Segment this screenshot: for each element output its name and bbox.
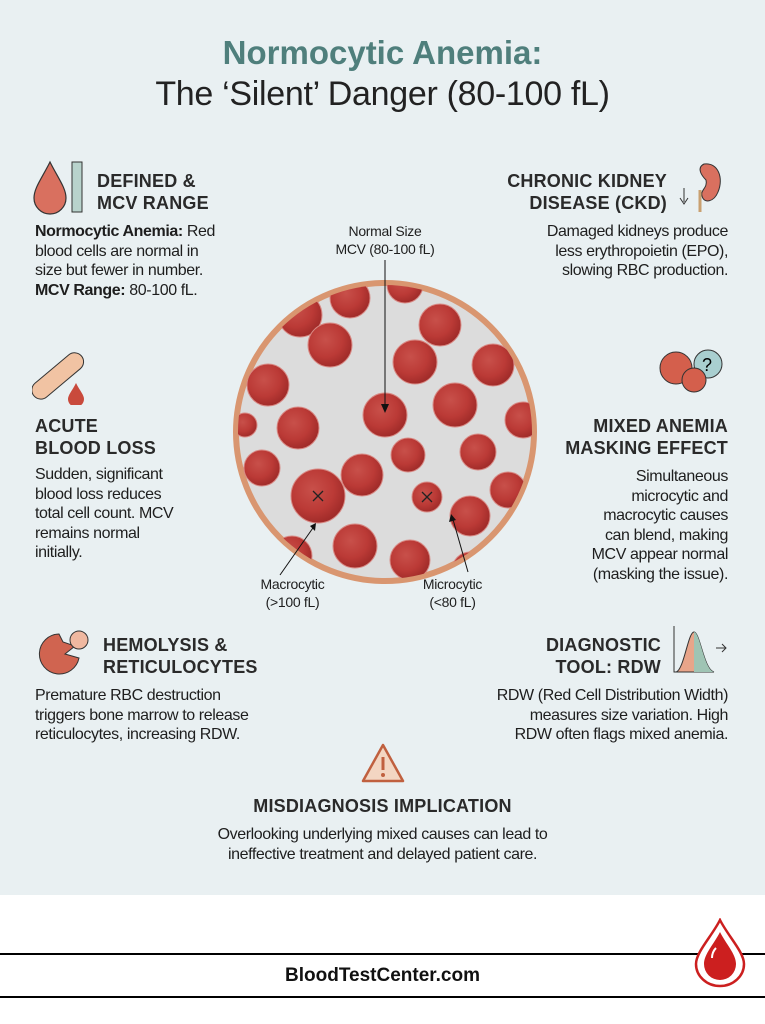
text: defined: MCV Range: 80-100 fL. xyxy=(35,282,197,298)
heading: rdw: DIAGNOSTIC xyxy=(546,635,661,655)
label: microcytic with arrow: (<80 fL) xyxy=(429,594,476,610)
text: ckd: slowing RBC production. xyxy=(562,262,728,279)
text: mixed: (masking the issue). xyxy=(593,566,728,582)
label: microcytic with arrow xyxy=(423,514,482,610)
text: defined: blood cells are normal in xyxy=(35,242,198,260)
icon: kidney xyxy=(680,163,721,212)
text: misdiagnosis xyxy=(218,826,548,862)
text: ckd xyxy=(547,223,728,279)
footer xyxy=(0,953,765,998)
icon: bandage xyxy=(32,352,84,405)
icon: drop and ruler xyxy=(33,160,82,215)
text: ckd: Damaged kidneys produce xyxy=(547,223,728,240)
text: misdiagnosis: ineffective treatment and delayed patient care. xyxy=(228,846,537,862)
text: mixed: MCV appear normal xyxy=(592,546,728,563)
text: rdw: RDW often flags mixed anemia. xyxy=(515,726,728,743)
text: mixed: microcytic and xyxy=(631,488,728,504)
text: hemolysis: reticulocytes, increasing RDW. xyxy=(35,726,240,743)
heading: defined: DEFINED & xyxy=(97,171,196,191)
heading: hemolysis xyxy=(103,635,258,677)
heading: rdw: TOOL: RDW xyxy=(556,657,661,677)
heading: ckd: CHRONIC KIDNEY xyxy=(507,171,667,191)
heading: rdw xyxy=(546,635,661,677)
label: microcytic with arrow: Microcytic xyxy=(423,576,482,592)
footer text: BloodTestCenter.com xyxy=(285,965,480,986)
label: macrocytic with arrow: (>100 fL) xyxy=(266,594,319,610)
text: acute: Sudden, significant xyxy=(35,466,163,483)
heading: defined xyxy=(97,171,209,213)
icon: hemolysis xyxy=(38,630,88,674)
label: macrocytic with arrow: Macrocytic xyxy=(261,576,324,592)
text: misdiagnosis: Overlooking underlying mixed causes can lead to xyxy=(218,826,547,843)
icon: rdw curve xyxy=(674,626,727,672)
text: rdw: RDW (Red Cell Distribution Width) xyxy=(497,687,728,704)
text: acute: remains normal xyxy=(35,524,140,542)
heading: defined: MCV RANGE xyxy=(97,193,209,213)
text: mixed: can blend, making xyxy=(605,526,728,544)
icon: footer blood drop xyxy=(694,918,746,988)
text: mixed: macrocytic causes xyxy=(603,507,728,524)
text: mixed xyxy=(592,468,728,582)
icon: cells question: ? xyxy=(702,355,712,375)
title: The ‘Silent’ Danger (80-100 fL) xyxy=(155,75,610,113)
label: normal size with arrow: Normal Size xyxy=(349,223,421,239)
text: hemolysis: triggers bone marrow to release xyxy=(35,706,248,724)
heading: acute xyxy=(35,416,156,458)
icon: warning xyxy=(362,744,404,782)
text: defined xyxy=(35,223,215,298)
text: acute: blood loss reduces xyxy=(35,486,161,502)
heading: mixed xyxy=(565,416,728,458)
text: rdw xyxy=(497,687,728,743)
heading: ckd: DISEASE (CKD) xyxy=(529,193,667,213)
text: defined: Normocytic Anemia: Red xyxy=(35,223,215,240)
text: ckd: less erythropoietin (EPO), xyxy=(555,242,728,260)
label: macrocytic with arrow xyxy=(261,523,324,610)
label: normal size with arrow xyxy=(336,223,434,413)
label: normal size with arrow: MCV (80-100 fL) xyxy=(336,241,434,257)
icon: cells question xyxy=(660,350,722,392)
heading: mixed: MIXED ANEMIA xyxy=(593,416,728,436)
text: defined: size but fewer in number. xyxy=(35,262,203,279)
heading: acute: ACUTE xyxy=(35,416,98,436)
heading: ckd xyxy=(507,171,667,213)
text: hemolysis: Premature RBC destruction xyxy=(35,687,221,704)
heading: mixed: MASKING EFFECT xyxy=(565,438,728,458)
text: acute: total cell count. MCV xyxy=(35,505,173,522)
heading: hemolysis: RETICULOCYTES xyxy=(103,657,258,677)
microscope view xyxy=(233,280,537,584)
text: rdw: measures size variation. High xyxy=(530,706,728,724)
heading: hemolysis: HEMOLYSIS & xyxy=(103,635,228,655)
heading: acute: BLOOD LOSS xyxy=(35,438,156,458)
heading: misdiagnosis: MISDIAGNOSIS IMPLICATION xyxy=(253,796,512,816)
title xyxy=(155,34,610,113)
text: mixed: Simultaneous xyxy=(636,468,728,485)
title: Normocytic Anemia: xyxy=(223,34,542,71)
text: acute: initially. xyxy=(35,544,82,561)
text: hemolysis xyxy=(35,687,248,743)
text: acute xyxy=(35,466,174,561)
